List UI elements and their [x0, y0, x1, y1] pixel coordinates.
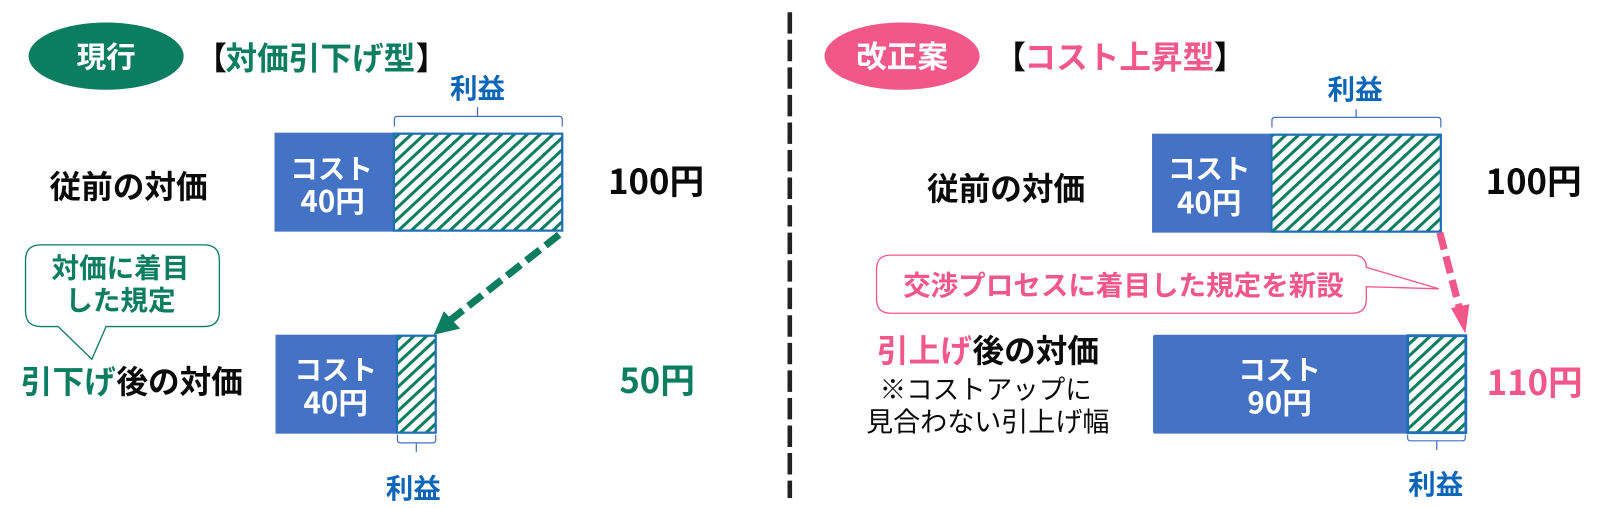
callout: price focused rule: 対価に着目 — [52, 246, 189, 286]
label: after increase: 後の対価 — [972, 326, 1099, 372]
label: profit top: 利益 — [450, 66, 506, 106]
panel: current — [21, 22, 704, 506]
bar: before price — [1152, 134, 1441, 233]
badge: proposed — [824, 22, 980, 90]
bar: after reduction — [276, 335, 436, 434]
note: increase insufficient: ※コストアップに — [880, 368, 1092, 407]
badge: current: 現行 — [77, 33, 136, 76]
heading: current type: 対価引下げ型 — [226, 33, 415, 79]
value: 50 yen: 50円 — [619, 353, 695, 403]
label: after reduction — [21, 357, 243, 403]
bar: after increase: コスト — [1238, 348, 1321, 388]
badge: proposed: 改正案 — [856, 31, 948, 76]
bar: before price: コスト — [1168, 147, 1251, 187]
bar: after increase — [1153, 335, 1466, 434]
callout: price focused rule — [26, 245, 219, 359]
heading: proposed type: コスト上昇型 — [1025, 32, 1214, 78]
callout: negotiation process rule: 交渉プロセスに着目した規定を新設 — [903, 263, 1344, 303]
bar: before price: 40円 — [1177, 179, 1241, 222]
bracket: profit top — [1272, 109, 1441, 128]
bracket: profit top — [394, 107, 562, 127]
label: profit bottom: 利益 — [386, 466, 441, 506]
arrow: price increase — [1440, 233, 1469, 334]
label: profit bottom: 利益 — [1408, 462, 1464, 502]
divider — [788, 12, 792, 498]
callout: negotiation process rule — [877, 255, 1439, 313]
heading: current type: 【 — [195, 33, 227, 79]
callout: price focused rule: した規定 — [65, 278, 176, 318]
bar: before price: 40円 — [300, 178, 365, 221]
label: after reduction: 後の対価 — [116, 357, 243, 403]
bracket: profit bottom — [397, 435, 436, 452]
bracket: profit bottom — [1408, 435, 1465, 450]
heading: proposed type: 【 — [994, 32, 1026, 78]
heading: proposed type: 】 — [1214, 32, 1245, 78]
bar: before price: コスト — [290, 147, 373, 187]
arrow: price reduction — [434, 235, 559, 335]
label: after increase — [877, 326, 1099, 372]
value: 100 yen: 100円 — [608, 154, 704, 204]
label: before price: 従前の対価 — [50, 162, 208, 208]
note: increase insufficient: 見合わない引上げ幅 — [866, 401, 1109, 440]
value: 110 yen: 110円 — [1487, 355, 1583, 405]
label: after increase: 引上げ — [877, 326, 972, 372]
label: profit top: 利益 — [1328, 67, 1383, 107]
panel: proposed — [824, 22, 1583, 502]
value: 100 yen: 100円 — [1486, 154, 1582, 204]
bar: after reduction: 40円 — [303, 379, 368, 422]
label: before price: 従前の対価 — [927, 164, 1085, 210]
bar: after reduction: コスト — [294, 348, 377, 388]
badge: current — [29, 22, 184, 90]
label: after reduction: 引下げ — [21, 357, 116, 403]
bar: after increase: 90円 — [1247, 379, 1312, 422]
note: increase insufficient — [866, 368, 1109, 440]
bar: before price — [274, 133, 562, 232]
heading: current type: 】 — [416, 33, 447, 79]
